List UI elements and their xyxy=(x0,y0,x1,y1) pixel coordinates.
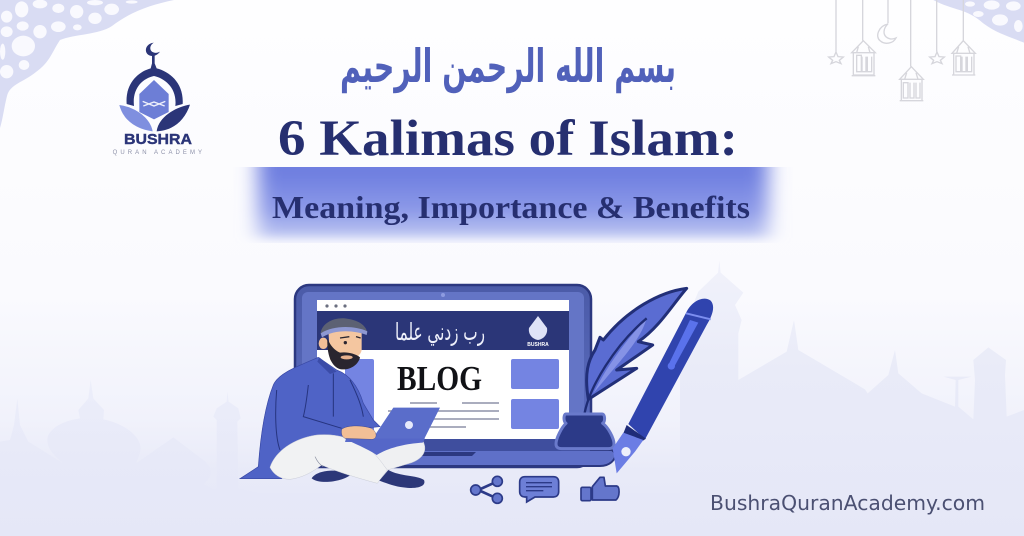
right trouser leg xyxy=(367,441,425,470)
star right xyxy=(930,52,944,64)
browser dots xyxy=(325,304,347,308)
hand xyxy=(341,426,376,439)
screen xyxy=(317,300,569,439)
laptop logo xyxy=(405,421,413,429)
icon: left hand xyxy=(119,105,153,131)
hanging lanterns, stars and crescent xyxy=(829,0,975,101)
right foot xyxy=(379,470,424,488)
content box 1 xyxy=(511,359,559,389)
title: 6 Kalimas of Islam: xyxy=(278,111,738,167)
feather, ink bottle, pen, reaction icons xyxy=(471,288,713,503)
collar xyxy=(317,357,337,374)
neck and face xyxy=(328,328,362,363)
header calligraphy: رب زدني علما xyxy=(395,318,485,346)
icon: crescent xyxy=(146,43,160,56)
lantern 1 xyxy=(852,41,875,76)
blog header band xyxy=(317,311,569,350)
icon: right hand xyxy=(157,105,190,131)
icon: mosque arch xyxy=(127,55,183,106)
icon: thumbs up xyxy=(581,477,619,501)
website url: BushraQuranAcademy.com xyxy=(710,491,985,515)
subtitle banner xyxy=(242,167,784,243)
crescent xyxy=(878,24,896,43)
blog side box behind figure xyxy=(345,359,374,431)
small laptop xyxy=(345,408,440,442)
laptop base xyxy=(300,450,616,466)
mosque skyline left xyxy=(0,380,1024,536)
shadow foot xyxy=(312,471,352,482)
lantern 3 xyxy=(952,41,975,75)
robe xyxy=(240,357,380,479)
laptop camera xyxy=(441,293,445,297)
content box 2 xyxy=(511,399,559,429)
subtitle: Meaning, Importance & Benefits xyxy=(272,190,750,225)
icon: open book niche xyxy=(139,80,169,119)
ornament: top-right lattice corner xyxy=(933,0,1024,43)
header logo xyxy=(527,316,549,348)
laptop with blog page xyxy=(295,285,616,467)
mosque skyline right xyxy=(680,260,1024,536)
feather quill xyxy=(584,288,687,417)
trousers xyxy=(270,435,387,483)
beard xyxy=(327,338,360,369)
content lines xyxy=(388,403,499,427)
icon: comment xyxy=(520,477,559,502)
logo name: BUSHRA xyxy=(124,132,192,148)
header logo: BUSHRA xyxy=(527,342,549,348)
ink bottle xyxy=(556,414,614,449)
lantern 2 xyxy=(900,67,923,101)
fountain pen xyxy=(613,299,713,473)
logo tagline: QURAN ACADEMY xyxy=(113,150,202,156)
eye xyxy=(344,341,347,344)
laptop lid xyxy=(295,285,591,467)
bismillah calligraphy: بسم الله الرحمن الرحيم xyxy=(340,39,676,93)
star left xyxy=(829,52,843,64)
blog word: BLOG xyxy=(397,359,482,398)
man with laptop xyxy=(240,318,440,488)
ear xyxy=(319,338,328,349)
icon: share xyxy=(471,476,502,503)
ornament: top-left lattice corner xyxy=(0,0,174,128)
logo: Bushra Quran Academy xyxy=(113,43,202,156)
cap xyxy=(321,318,367,333)
